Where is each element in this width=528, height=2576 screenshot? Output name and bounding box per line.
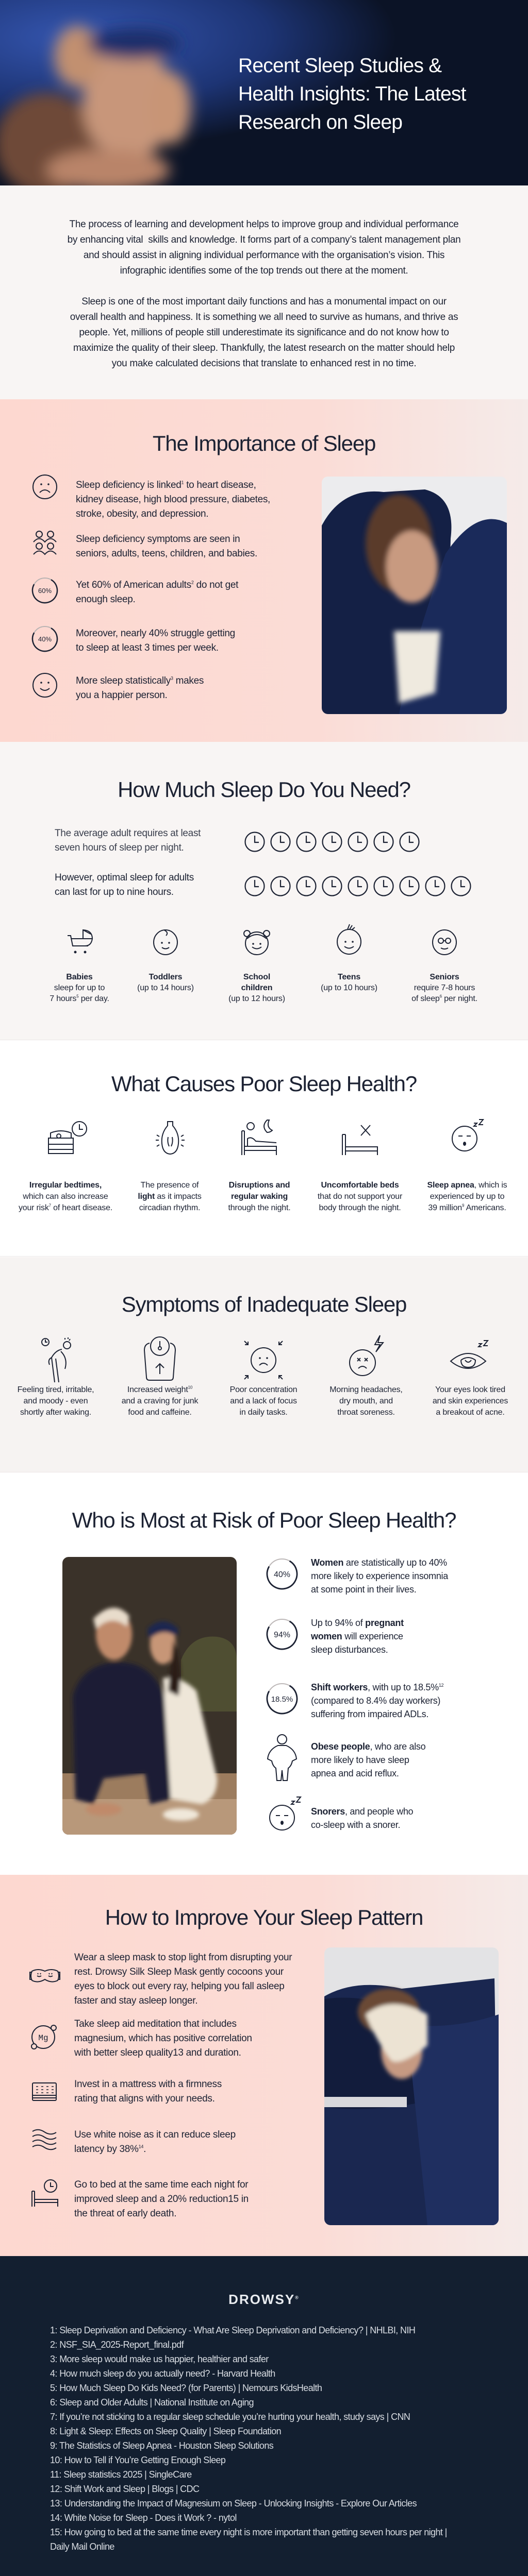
text: 60% of adults (76, 580, 238, 605)
text: mattress tip: rating that aligns with your needs. (74, 2093, 215, 2104)
icon: stroller (68, 929, 93, 953)
text: disruptions: through the night. (228, 1204, 290, 1212)
icon: toddler face (153, 929, 178, 955)
reference list: 5: How Much Sleep Do Kids Need? (for Parents) | Nemours KidsHealth (50, 2383, 322, 2393)
text: increased weight: Increased weight10 (127, 1385, 192, 1394)
text: uncomfortable beds: Uncomfortable beds (321, 1181, 399, 1190)
reference list: 2: NSF_SIA_2025-Report_final.pdf (50, 2340, 184, 2350)
photo: couple in pyjamas (62, 1557, 237, 1835)
stat: obese people: Obese people, who are also (311, 1741, 425, 1752)
photo: woman sleeping on navy pillow (322, 477, 507, 714)
text: nine hours: can last for up to nine hours. (55, 887, 174, 897)
icon: tired person (41, 1337, 71, 1383)
icon: 18.5% ring: 18.5% (271, 1695, 293, 1704)
group: seniors: require 7-8 hours (414, 984, 475, 992)
text: poor concentration: and a lack of focus (230, 1397, 297, 1405)
icon: 60% ring: 60% (38, 587, 52, 595)
stat: obese people: apnea and acid reflux. (311, 1768, 399, 1778)
icon: senior face with glasses (432, 929, 457, 955)
title: Recent Sleep Studies & (238, 55, 441, 77)
intro paragraph 2: overall health and happiness. It is something we all need to survive as humans, and thrive as (70, 312, 458, 323)
icon: 40% ring (32, 626, 58, 652)
panel: causes of poor sleep (0, 1041, 528, 1257)
reference list (50, 2323, 504, 2554)
text: uncomfortable beds: body through the night. (319, 1204, 401, 1212)
icon: people (33, 531, 57, 555)
text: sleep mask tip: faster and stay asleep longer. (74, 1995, 197, 2006)
heading: The Importance of Sleep (153, 431, 375, 455)
stat: snorers: Snorers, and people who (311, 1806, 413, 1817)
icon: teen face (337, 924, 361, 955)
group: seniors: Seniors (430, 973, 459, 981)
hero banner (0, 0, 528, 185)
text: happier person: More sleep statistically3 makes (76, 675, 204, 686)
icon: happy face (32, 673, 57, 698)
reference list: 7: If you’re not sticking to a regular sleep schedule you’re hurting your health, study says | CNN (50, 2412, 410, 2422)
text: increased weight (108, 1384, 211, 1418)
text: sleep apnea (427, 1181, 507, 1212)
text: irregular bedtimes: which can also increase (23, 1192, 108, 1201)
reference list: 14: White Noise for Sleep - Does it Work ? - nytol (50, 2513, 237, 2523)
reference list: 6: Sleep and Older Adults | National Institute on Aging (50, 2397, 254, 2408)
text: 60% of adults: Yet 60% of American adults2 do not get (76, 580, 238, 590)
intro paragraph 1: infographic identifies some of the top trends out there at the moment. (120, 265, 408, 276)
group: toddlers (137, 929, 194, 992)
text: seven hours (55, 828, 201, 853)
text: magnesium tip: with better sleep quality13 and duration. (74, 2047, 241, 2058)
text: bedtime tip: improved sleep and a 20% reduction15 in (74, 2194, 249, 2205)
stat: pregnant women 94%: Up to 94% of pregnant (311, 1618, 404, 1628)
stat: shift workers 18.5%: (compared to 8.4% day workers) (311, 1696, 440, 1706)
text: magnesium tip: magnesium, which has positive correlation (74, 2033, 252, 2044)
text: uncomfortable beds (318, 1181, 402, 1212)
intro paragraph 2: people. Yet, millions of people still underestimate its significance and do not know how to (79, 327, 449, 338)
text: 40% struggle: Moreover, nearly 40% struggle getting (76, 628, 235, 639)
reference list: 11: Sleep statistics 2025 | SingleCare (50, 2469, 192, 2480)
panel: importance of sleep (0, 399, 528, 742)
group: teens: Teens (338, 973, 360, 981)
text: uncomfortable beds: that do not support your (318, 1192, 402, 1201)
intro paragraph 1 (68, 219, 460, 276)
intro paragraph 2: maximize the quality of their sleep. Thankfully, the latest research on the matter should help (73, 343, 455, 353)
text: happier person: you a happier person. (76, 690, 167, 701)
text: feeling tired: shortly after waking. (20, 1408, 91, 1417)
icon: 94% ring: 94% (274, 1631, 290, 1639)
text: light: The presence of (141, 1181, 199, 1190)
text: poor concentration: Poor concentration (230, 1385, 297, 1394)
logo: DROWSY: DROWSY® (228, 2292, 300, 2307)
reference list: 8: Light & Sleep: Effects on Sleep Quality | Sleep Foundation (50, 2426, 281, 2436)
reference list: 1: Sleep Deprivation and Deficiency - What Are Sleep Deprivation and Deficiency? | NHLBI, NIH (50, 2325, 415, 2335)
text: sleep apnea: Sleep apnea, which is (427, 1181, 507, 1190)
reference list: Daily Mail Online (50, 2541, 114, 2552)
text: 40% struggle (76, 628, 235, 653)
group: toddlers: Toddlers (149, 973, 182, 981)
reference list: 15: How going to bed at the same time every night is more important than getting seven hours per night | (50, 2527, 447, 2537)
footer: references (0, 2256, 528, 2576)
text: bedtime tip (74, 2178, 249, 2221)
text: feeling tired: Feeling tired, irritable, (18, 1385, 94, 1394)
intro paragraph 2 (70, 296, 458, 369)
icon: 18.5% ring (266, 1682, 299, 1715)
text: increased weight: and a craving for junk (122, 1397, 198, 1405)
icon: light bulb (156, 1121, 185, 1155)
icon: child face (243, 930, 270, 955)
stat: pregnant women 94%: women will experience (311, 1631, 403, 1641)
icon: 40% ring: 40% (38, 635, 52, 643)
text: nine hours (55, 872, 194, 897)
icon: magnesium (30, 2023, 59, 2052)
reference list: 10: How to Tell if You’re Getting Enough Sleep (50, 2455, 225, 2465)
group: toddlers: (up to 14 hours) (137, 984, 194, 992)
text: light (138, 1181, 202, 1212)
icon: person in bed with moon (241, 1120, 277, 1155)
text: headaches (315, 1384, 418, 1418)
intro paragraph 2: Sleep is one of the most important daily functions and has a monumental impact on our (81, 296, 447, 307)
intro paragraph 2: you make calculated decisions that translate to enhanced rest in no time. (112, 358, 416, 369)
group: babies: sleep for up to (54, 984, 105, 992)
reference list: 3: More sleep would make us happier, healthier and safer (50, 2354, 269, 2364)
icon: sad face (32, 474, 57, 499)
text: tired eyes (419, 1384, 522, 1418)
group: teens: (up to 10 hours) (321, 984, 377, 992)
group: babies: Babies (66, 973, 93, 981)
intro paragraph 1: and should assist in aligning individual performance with the organisation’s vision. This (84, 250, 444, 261)
icon: 40% ring: 40% (274, 1570, 290, 1579)
icon: 40% ring (266, 1557, 299, 1590)
icon: scale (143, 1336, 176, 1381)
text: headaches: Morning headaches, (329, 1385, 403, 1394)
text: symptoms in all ages (76, 534, 257, 559)
icon: bed with clock (31, 2179, 59, 2208)
text: feeling tired (18, 1385, 94, 1417)
text: linked diseases: kidney disease, high blood pressure, diabetes, (76, 494, 270, 505)
text: irregular bedtimes (19, 1181, 112, 1212)
text: disruptions (228, 1181, 290, 1212)
stat: pregnant women 94% (266, 1616, 513, 1659)
stat: shift workers 18.5%: Shift workers, with up to 18.5%12 (311, 1682, 443, 1692)
reference list: 4: How much sleep do you actually need? - Harvard Health (50, 2368, 275, 2379)
text: tired eyes: a breakout of acne. (436, 1408, 505, 1417)
panel: how to improve (0, 1875, 528, 2256)
text: sleep apnea: 39 million9 Americans. (428, 1204, 506, 1212)
stat: pregnant women 94%: sleep disturbances. (311, 1645, 388, 1655)
text: happier person (76, 675, 204, 701)
text: bedtime tip: the threat of early death. (74, 2208, 176, 2219)
icon: mattress (31, 2082, 57, 2102)
text: magnesium tip: Take sleep aid meditation that includes (74, 2019, 237, 2029)
text: sleep mask tip: Wear a sleep mask to stop light from disrupting your (74, 1952, 292, 1963)
stat: shift workers 18.5% (266, 1681, 513, 1724)
text: light: circadian rhythm. (139, 1204, 200, 1212)
group: seniors: of sleep6 per night. (411, 994, 477, 1003)
icon: tired eye (450, 1340, 491, 1374)
intro paragraph 1: The process of learning and development helps to improve group and individual performance (70, 219, 458, 230)
title (238, 55, 466, 133)
group: school children (228, 930, 285, 1003)
text: headaches: dry mouth, and (339, 1397, 393, 1405)
panel: how much sleep (0, 742, 528, 1040)
text: irregular bedtimes: your risk7 of heart disease. (19, 1204, 112, 1212)
text: linked diseases (76, 480, 270, 519)
icon: bed with clock (48, 1121, 87, 1154)
text: 60% of adults: enough sleep. (76, 594, 135, 605)
hero photo: woman with sleep mask (0, 0, 383, 185)
stat: obese people (266, 1734, 513, 1782)
heading: What Causes Poor Sleep Health? (111, 1072, 417, 1096)
stat: women 40%: more likely to experience insomnia (311, 1571, 448, 1581)
text: symptoms in all ages: Sleep deficiency symptoms are seen in (76, 534, 240, 545)
heading: How to Improve Your Sleep Pattern (105, 1905, 423, 1929)
icon: headache face (348, 1334, 389, 1377)
icon: sleep mask (29, 1968, 61, 1984)
stat: snorers: co-sleep with a snorer. (311, 1820, 400, 1830)
text: sleep mask tip (74, 1951, 292, 2008)
intro text panel (0, 185, 528, 399)
text: sleep apnea: experienced by up to (430, 1192, 504, 1201)
stat: shift workers 18.5%: suffering from impaired ADLs. (311, 1709, 428, 1719)
text: sleep mask tip: eyes to block out every ray, helping you fall asleep (74, 1981, 285, 1992)
reference list: 9: The Statistics of Sleep Apnea - Houston Sleep Solutions (50, 2441, 273, 2451)
stat: women 40%: Women are statistically up to 40% (311, 1557, 447, 1568)
group: babies (50, 929, 109, 1003)
icon: concentration face (243, 1340, 284, 1380)
text: mattress tip: Invest in a mattress with a firmness (74, 2079, 222, 2090)
panel: symptoms (0, 1257, 528, 1472)
text: seven hours: seven hours of sleep per night. (55, 842, 184, 853)
group: school children: children (241, 984, 272, 992)
text: magnesium tip (74, 2017, 252, 2060)
title: Health Insights: The Latest (238, 83, 466, 105)
group: babies: 7 hours5 per day. (50, 994, 109, 1003)
group: school children: School (243, 973, 270, 981)
photo: woman with silk mask under navy duvet (324, 1947, 499, 2225)
heading: Symptoms of Inadequate Sleep (122, 1292, 406, 1316)
text: bedtime tip: Go to bed at the same time each night for (74, 2179, 248, 2190)
text: nine hours: However, optimal sleep for adults (55, 872, 194, 883)
text: white noise tip: Use white noise as it can reduce sleep (74, 2129, 236, 2140)
text: poor concentration: in daily tasks. (239, 1408, 288, 1417)
text: disruptions: Disruptions and (229, 1181, 290, 1190)
text: irregular bedtimes: Irregular bedtimes, (29, 1181, 102, 1190)
text: mattress tip (74, 2077, 222, 2106)
stat: women 40% (266, 1556, 513, 1599)
icon: magnesium: Mg (38, 2033, 48, 2043)
icon: snoring face (452, 1119, 484, 1151)
clocks row: 7 (244, 832, 420, 852)
text: headaches: throat soreness. (337, 1408, 395, 1417)
group: seniors (411, 929, 477, 1003)
text: 40% struggle: to sleep at least 3 times per week. (76, 642, 219, 653)
heading: Who is Most at Risk of Poor Sleep Health? (72, 1508, 456, 1532)
text: white noise tip: latency by 38%14. (74, 2144, 146, 2155)
icon: 94% ring (266, 1618, 299, 1651)
text: seven hours: The average adult requires at least (55, 828, 201, 839)
text: tired eyes: and skin experiences (433, 1397, 508, 1405)
reference list: 13: Understanding the Impact of Magnesium on Sleep - Unlocking Insights - Explore Our Articles (50, 2498, 417, 2509)
icon: snoring face (270, 1795, 303, 1831)
heading: How Much Sleep Do You Need? (118, 777, 410, 802)
icon: 60% ring (32, 578, 58, 604)
stat: women 40%: at some point in their lives. (311, 1584, 416, 1595)
text: linked diseases: Sleep deficiency is linked1 to heart disease, (76, 480, 256, 490)
text: tired eyes: Your eyes look tired (435, 1385, 505, 1394)
reference list: 12: Shift Work and Sleep | Blogs | CDC (50, 2484, 199, 2494)
icon: obese person (267, 1734, 298, 1782)
icon: bed with X (342, 1125, 378, 1155)
text: increased weight: food and caffeine. (128, 1408, 192, 1417)
panel: who is at risk (0, 1473, 528, 1875)
text: poor concentration (212, 1384, 315, 1418)
intro paragraph 1: by enhancing vital skills and knowledge. It forms part of a company’s talent management plan (68, 234, 460, 245)
stat: snorers (266, 1795, 513, 1832)
text: linked diseases: stroke, obesity, and depression. (76, 509, 208, 519)
group: school children: (up to 12 hours) (228, 994, 285, 1003)
text: feeling tired: and moody - even (24, 1397, 88, 1405)
clocks row: 9 (244, 876, 471, 896)
text: light: light as it impacts (138, 1192, 202, 1201)
text: white noise tip (74, 2128, 236, 2157)
group: teens (321, 924, 377, 992)
text: sleep mask tip: rest. Drowsy Silk Sleep Mask gently cocoons your (74, 1967, 284, 1977)
icon: white noise waves (31, 2129, 57, 2151)
stat: obese people: more likely to have sleep (311, 1755, 409, 1765)
text: symptoms in all ages: seniors, adults, teens, children, and babies. (76, 548, 257, 559)
text: disruptions: regular waking (231, 1192, 288, 1201)
title: Research on Sleep (238, 111, 402, 133)
